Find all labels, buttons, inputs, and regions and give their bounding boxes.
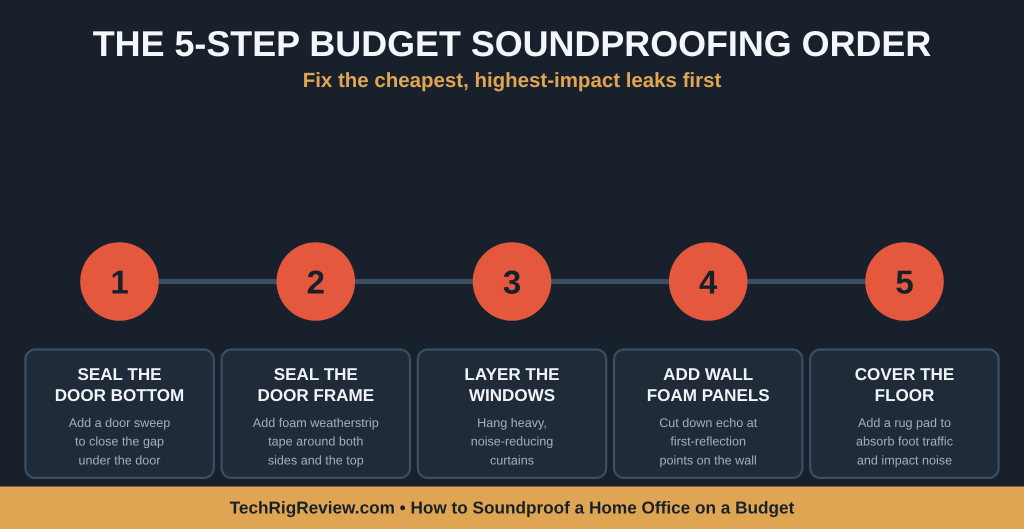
step 5 marker: 5 — [895, 264, 914, 301]
step 1 marker — [80, 242, 159, 321]
panel: step 1 card: to close the gap — [75, 435, 164, 449]
panel: step 2 card: Add foam weatherstrip — [253, 416, 379, 430]
title: THE 5-STEP BUDGET SOUNDPROOFING ORDER — [93, 24, 931, 64]
panel: step 2 card: SEAL THE — [274, 365, 358, 384]
panel: step 4 card: ADD WALL — [663, 365, 753, 384]
panel: step 4 card: Cut down echo at — [659, 416, 758, 430]
panel: step 3 card: WINDOWS — [469, 386, 555, 405]
step 2 marker: 2 — [307, 264, 325, 301]
panel: step 2 card: sides and the top — [268, 453, 364, 467]
panel: step 3 card: Hang heavy, — [477, 416, 547, 430]
panel: step 4 card: FOAM PANELS — [647, 386, 770, 405]
footer bar — [0, 486, 1024, 529]
panel: step 3 card — [418, 350, 606, 478]
panel: step 5 card — [810, 350, 999, 478]
panel: step 1 card — [25, 350, 214, 478]
panel: step 3 card: curtains — [490, 453, 534, 467]
panel: step 4 card: first-reflection — [670, 435, 746, 449]
step 4 marker: 4 — [699, 264, 718, 301]
panel: step 2 card: DOOR FRAME — [258, 386, 374, 405]
panel: step 4 card — [614, 350, 802, 478]
panel: step 2 card — [222, 350, 410, 478]
panel: step 5 card: absorb foot traffic — [856, 435, 953, 449]
panel: step 3 card: LAYER THE — [464, 365, 560, 384]
panel: step 4 card: points on the wall — [660, 453, 757, 467]
footer bar: TechRigReview.com • How to Soundproof a Home Office on a Budget — [230, 498, 795, 518]
panel: step 1 card: DOOR BOTTOM — [55, 386, 184, 405]
subtitle: Fix the cheapest, highest-impact leaks first — [303, 69, 721, 92]
step 3 marker: 3 — [503, 264, 521, 301]
step 3 marker — [473, 242, 551, 321]
step 1 marker: 1 — [110, 264, 129, 301]
panel: step 5 card: FLOOR — [875, 386, 934, 405]
panel: step 5 card: and impact noise — [857, 453, 952, 467]
step 2 marker — [276, 242, 355, 321]
panel: step 2 card: tape around both — [268, 435, 363, 449]
panel: step 5 card: Add a rug pad to — [858, 416, 951, 430]
step 5 marker — [865, 242, 944, 321]
panel: step 1 card: SEAL THE — [77, 365, 162, 384]
panel: step 3 card: noise-reducing — [471, 435, 553, 449]
panel: step 1 card: under the door — [79, 453, 160, 467]
step 4 marker — [669, 242, 748, 321]
timeline connector — [119, 279, 904, 284]
panel: step 1 card: Add a door sweep — [69, 416, 170, 430]
panel: step 5 card: COVER THE — [855, 365, 954, 384]
